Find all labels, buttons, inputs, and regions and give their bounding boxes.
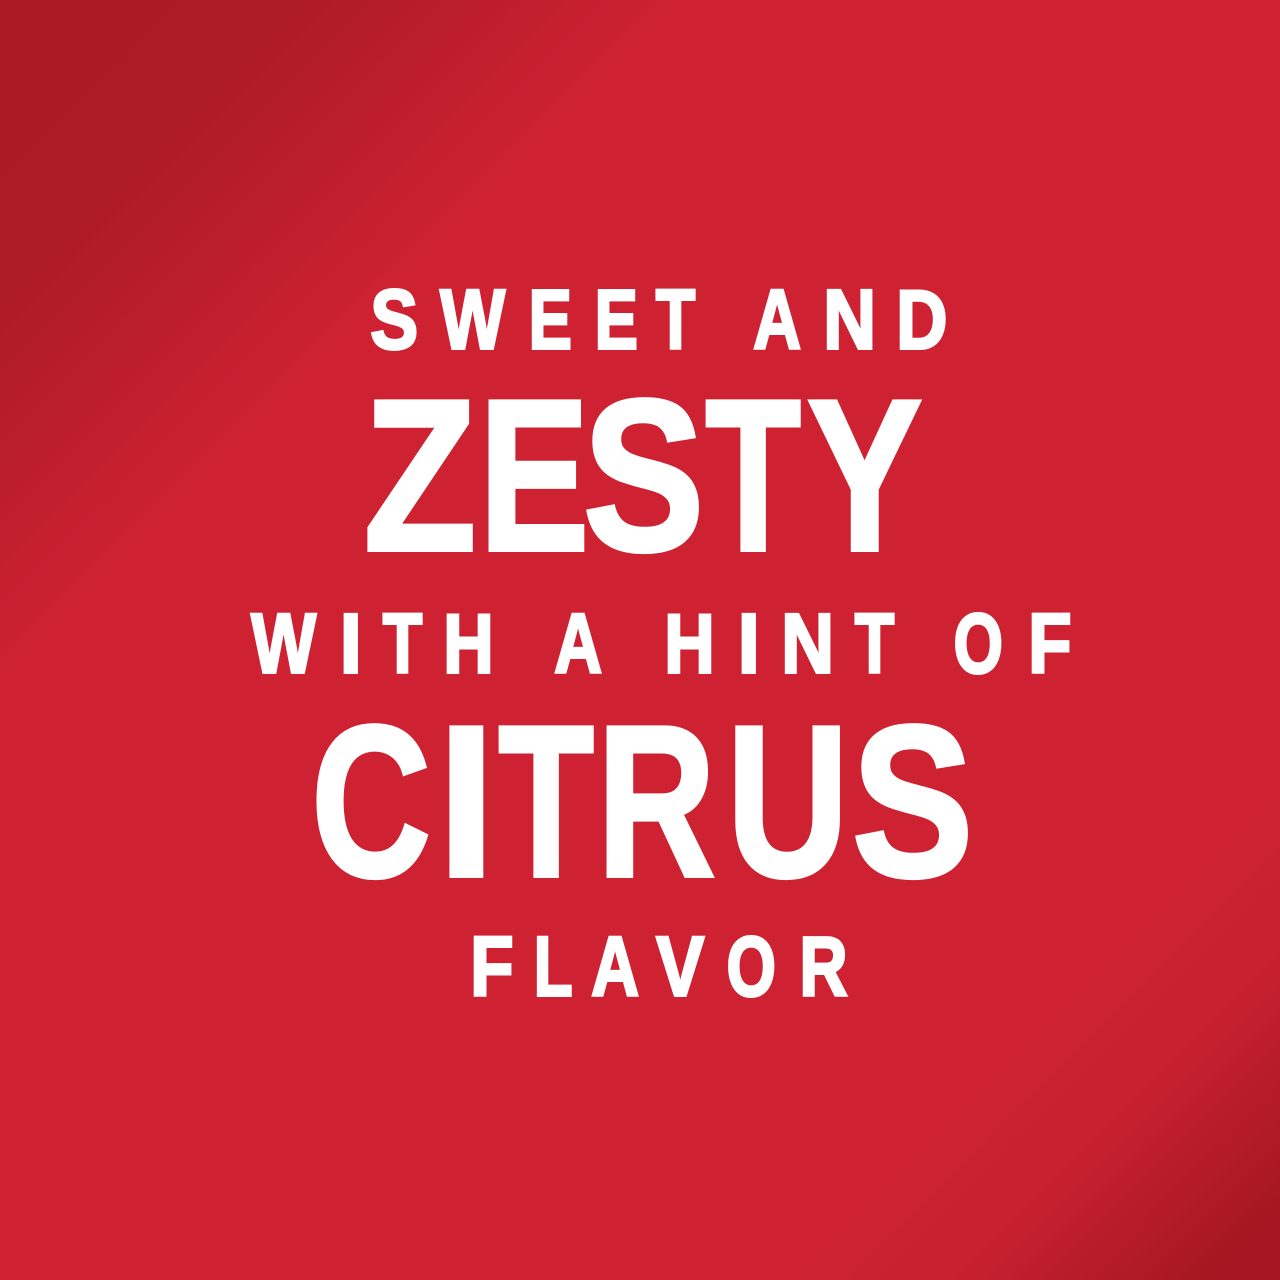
line: FLAVOR — [470, 919, 848, 1014]
line: SWEET AND: E — [529, 272, 572, 366]
line: ZESTY: Z — [364, 354, 476, 596]
line: SWEET AND: A — [753, 274, 801, 367]
line: FLAVOR: A — [591, 921, 639, 1014]
line: FLAVOR: R — [800, 920, 848, 1014]
line: ZESTY: S — [583, 355, 704, 596]
line: WITH A HINT OF: O — [954, 597, 1003, 691]
line: WITH A HINT OF: N — [781, 597, 834, 691]
line: CITRUS: C — [311, 681, 431, 922]
line: WITH A HINT OF: T — [383, 596, 422, 690]
line: WITH A HINT OF: W — [251, 598, 317, 691]
line: SWEET AND: D — [896, 274, 947, 367]
line: SWEET AND: S — [370, 272, 418, 367]
line: CITRUS: U — [727, 681, 849, 923]
line: CITRUS: S — [852, 681, 973, 922]
line: FLAVOR: L — [534, 920, 572, 1014]
line: WITH A HINT OF: I — [340, 598, 362, 691]
line: SWEET AND: W — [440, 274, 506, 367]
line: CITRUS: I — [437, 681, 495, 922]
line: FLAVOR: O — [727, 920, 776, 1014]
line: WITH A HINT OF: H — [443, 597, 494, 691]
line: CITRUS — [311, 680, 973, 923]
line: CITRUS: T — [498, 680, 594, 922]
line: SWEET AND: T — [656, 272, 695, 366]
line: ZESTY: E — [479, 355, 589, 596]
line: SWEET AND: E — [595, 272, 638, 366]
line: SWEET AND — [370, 272, 947, 367]
line: FLAVOR: F — [470, 921, 514, 1014]
line: WITH A HINT OF: I — [738, 598, 760, 691]
line: ZESTY: T — [705, 354, 801, 596]
line: WITH A HINT OF: F — [1028, 598, 1072, 691]
line: ZESTY — [364, 354, 922, 596]
line: WITH A HINT OF: H — [664, 597, 715, 691]
line: CITRUS: R — [597, 680, 715, 922]
line: WITH A HINT OF: T — [855, 596, 894, 690]
line: WITH A HINT OF: A — [554, 598, 602, 691]
line: FLAVOR: V — [656, 919, 704, 1014]
line: WITH A HINT OF — [251, 596, 1072, 691]
line: SWEET AND: N — [823, 273, 876, 367]
line: ZESTY: Y — [807, 356, 922, 596]
